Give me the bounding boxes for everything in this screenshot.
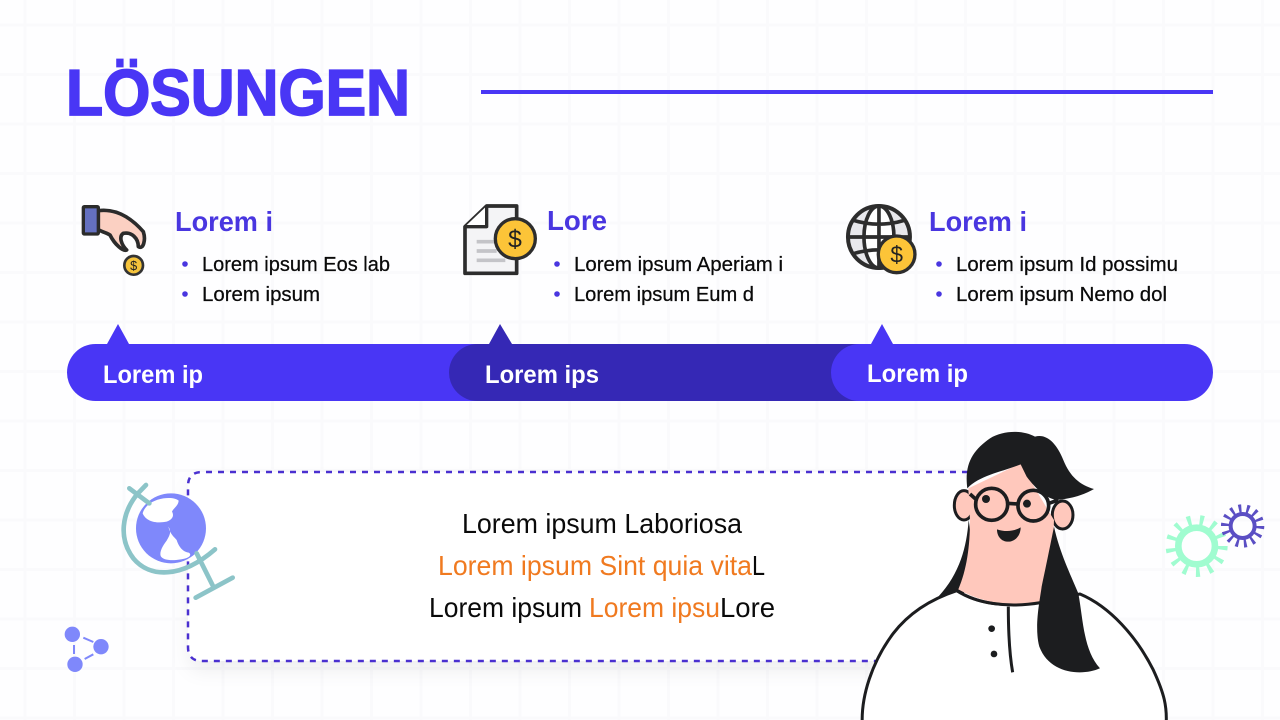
bullet list (182, 254, 390, 306)
bullet list (554, 254, 783, 306)
ears (954, 491, 974, 520)
segment 1 (67, 324, 507, 401)
segment 1: Lorem ip (103, 361, 203, 389)
icon: document with coin: $ (508, 226, 522, 253)
callout text: L (752, 550, 765, 581)
icon: green gear (1172, 521, 1222, 571)
callout text: Lore (720, 592, 775, 623)
segment 2 (449, 324, 899, 401)
icon: purple gear (1225, 509, 1260, 543)
heading: Lorem i (929, 206, 1027, 237)
pupils (982, 495, 1031, 508)
front hair (1037, 527, 1100, 672)
bullet list: Lorem ipsum Nemo dol (956, 284, 1167, 306)
bullet list: Lorem ipsum Aperiam i (574, 254, 783, 276)
bullet list: Lorem ipsum (202, 284, 320, 306)
face (958, 463, 1054, 604)
character: woman with glasses (862, 432, 1166, 720)
back hair (938, 520, 973, 597)
column 1 (83, 206, 390, 306)
glasses (970, 488, 1058, 521)
bullet list: Lorem ipsum Id possimu (956, 254, 1178, 276)
icon: document with coin (465, 206, 535, 273)
icon: desk globe (124, 485, 233, 598)
timeline bar (67, 324, 1213, 401)
bullet list: Lorem ipsum Eos lab (202, 254, 390, 276)
icon: globe with coin (847, 205, 915, 273)
bullet list (936, 254, 1178, 306)
callout text: Lorem ipsum (429, 592, 582, 623)
mouth (997, 527, 1021, 542)
top hair (967, 432, 1094, 500)
callout text: Lorem ipsu (589, 592, 720, 623)
title rule (481, 90, 1213, 94)
icon: network nodes (65, 627, 109, 672)
callout text (429, 508, 775, 623)
segment 2: Lorem ips (485, 361, 599, 389)
collar line (957, 591, 1041, 605)
bullet list: Lorem ipsum Eum d (574, 284, 754, 306)
icon: hand dropping coin (83, 207, 144, 275)
callout text: Lorem ipsum Sint quia vita (438, 550, 752, 581)
column 3 (847, 205, 1178, 306)
callout box (188, 472, 968, 661)
segment 3 (831, 324, 1213, 401)
icon: globe with coin: $ (890, 242, 903, 268)
icon: hand dropping coin: $ (130, 259, 137, 273)
heading: Lore (547, 205, 607, 236)
title: LÖSUNGEN (66, 57, 410, 130)
callout text: Lorem ipsum Laboriosa (462, 508, 742, 539)
shirt placket and buttons (988, 607, 1013, 672)
segment 3: Lorem ip (867, 360, 968, 388)
column 2 (465, 205, 783, 306)
heading: Lorem i (175, 206, 273, 237)
body (862, 591, 1166, 720)
